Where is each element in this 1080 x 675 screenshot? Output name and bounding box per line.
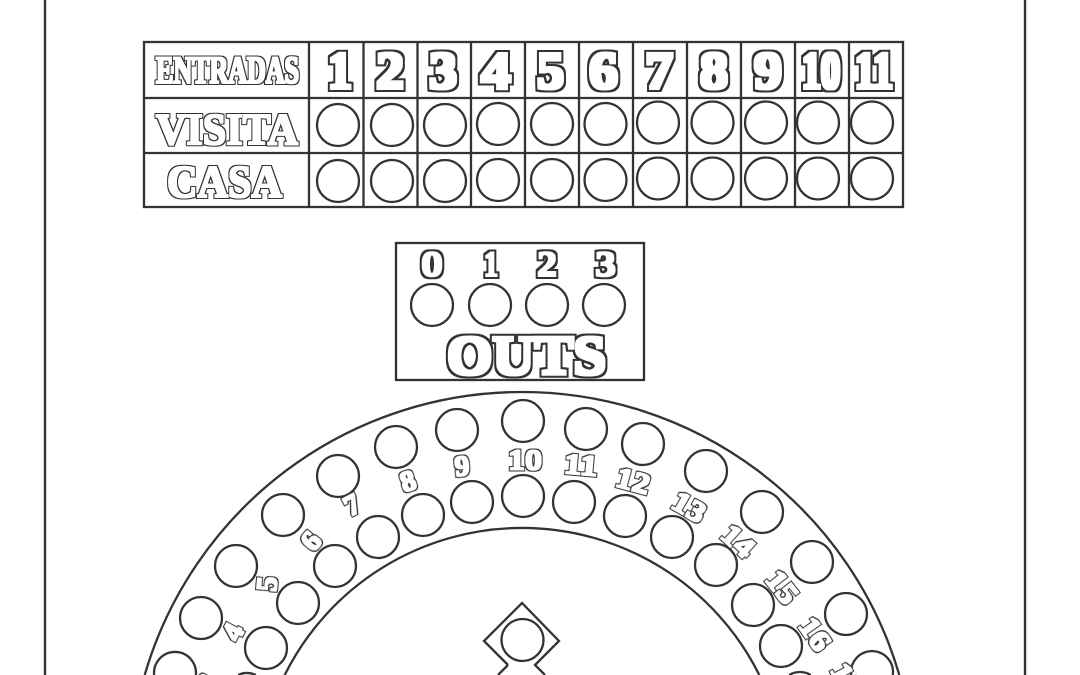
- arc band outlines: [145, 392, 899, 675]
- inning numbers: 2: [376, 43, 404, 100]
- inning numbers: 3: [429, 43, 457, 100]
- ring numbers: 11: [563, 448, 599, 483]
- icon: home base diamond: [484, 603, 559, 675]
- inning numbers: 5: [537, 43, 564, 100]
- home score circles: [317, 158, 893, 202]
- ring numbers: 16: [792, 611, 837, 657]
- inning numbers: 4: [481, 43, 511, 100]
- outs numbers: 0: [421, 244, 443, 284]
- ring numbers: 10: [508, 444, 542, 476]
- panel: batting order arc: [145, 392, 899, 675]
- outs circles: [411, 284, 625, 326]
- inning numbers: 9: [754, 43, 782, 100]
- inning numbers: 10: [802, 43, 840, 100]
- inning numbers: [328, 43, 893, 100]
- row labels: CASA: [167, 157, 282, 207]
- inning numbers: 6: [589, 43, 618, 100]
- ring numbers: 9: [453, 450, 471, 483]
- visitor score circles: [317, 102, 893, 146]
- ring numbers: 12: [612, 462, 653, 501]
- panel: outs: [396, 243, 644, 386]
- scoreboard grid: [144, 41, 903, 207]
- outs numbers: 1: [484, 244, 498, 284]
- ring numbers: 13: [666, 485, 711, 530]
- row labels: [156, 49, 299, 207]
- inning numbers: 11: [855, 43, 893, 100]
- ring numbers: 8: [396, 464, 420, 499]
- ring numbers: [190, 444, 868, 675]
- outer ring circles: [154, 400, 893, 675]
- row labels: VISITA: [156, 105, 298, 154]
- outs numbers: [421, 244, 616, 284]
- outs box: [396, 243, 644, 380]
- ring numbers: 15: [759, 564, 805, 611]
- outs heading: OUTS: [447, 325, 606, 386]
- inning numbers: 7: [645, 43, 673, 100]
- outs numbers: 3: [595, 244, 616, 284]
- row labels: ENTRADAS: [156, 49, 299, 92]
- ring numbers: 7: [338, 488, 366, 523]
- inning numbers: 1: [328, 43, 352, 100]
- ring numbers: 4: [216, 618, 251, 646]
- ring numbers: 14: [714, 518, 761, 565]
- ring numbers: 5: [251, 575, 284, 593]
- panel: innings scoreboard: [144, 41, 903, 207]
- inner ring circles: [238, 475, 811, 675]
- inning numbers: 8: [700, 43, 728, 100]
- ring numbers: 6: [294, 525, 328, 557]
- outs numbers: 2: [537, 244, 557, 284]
